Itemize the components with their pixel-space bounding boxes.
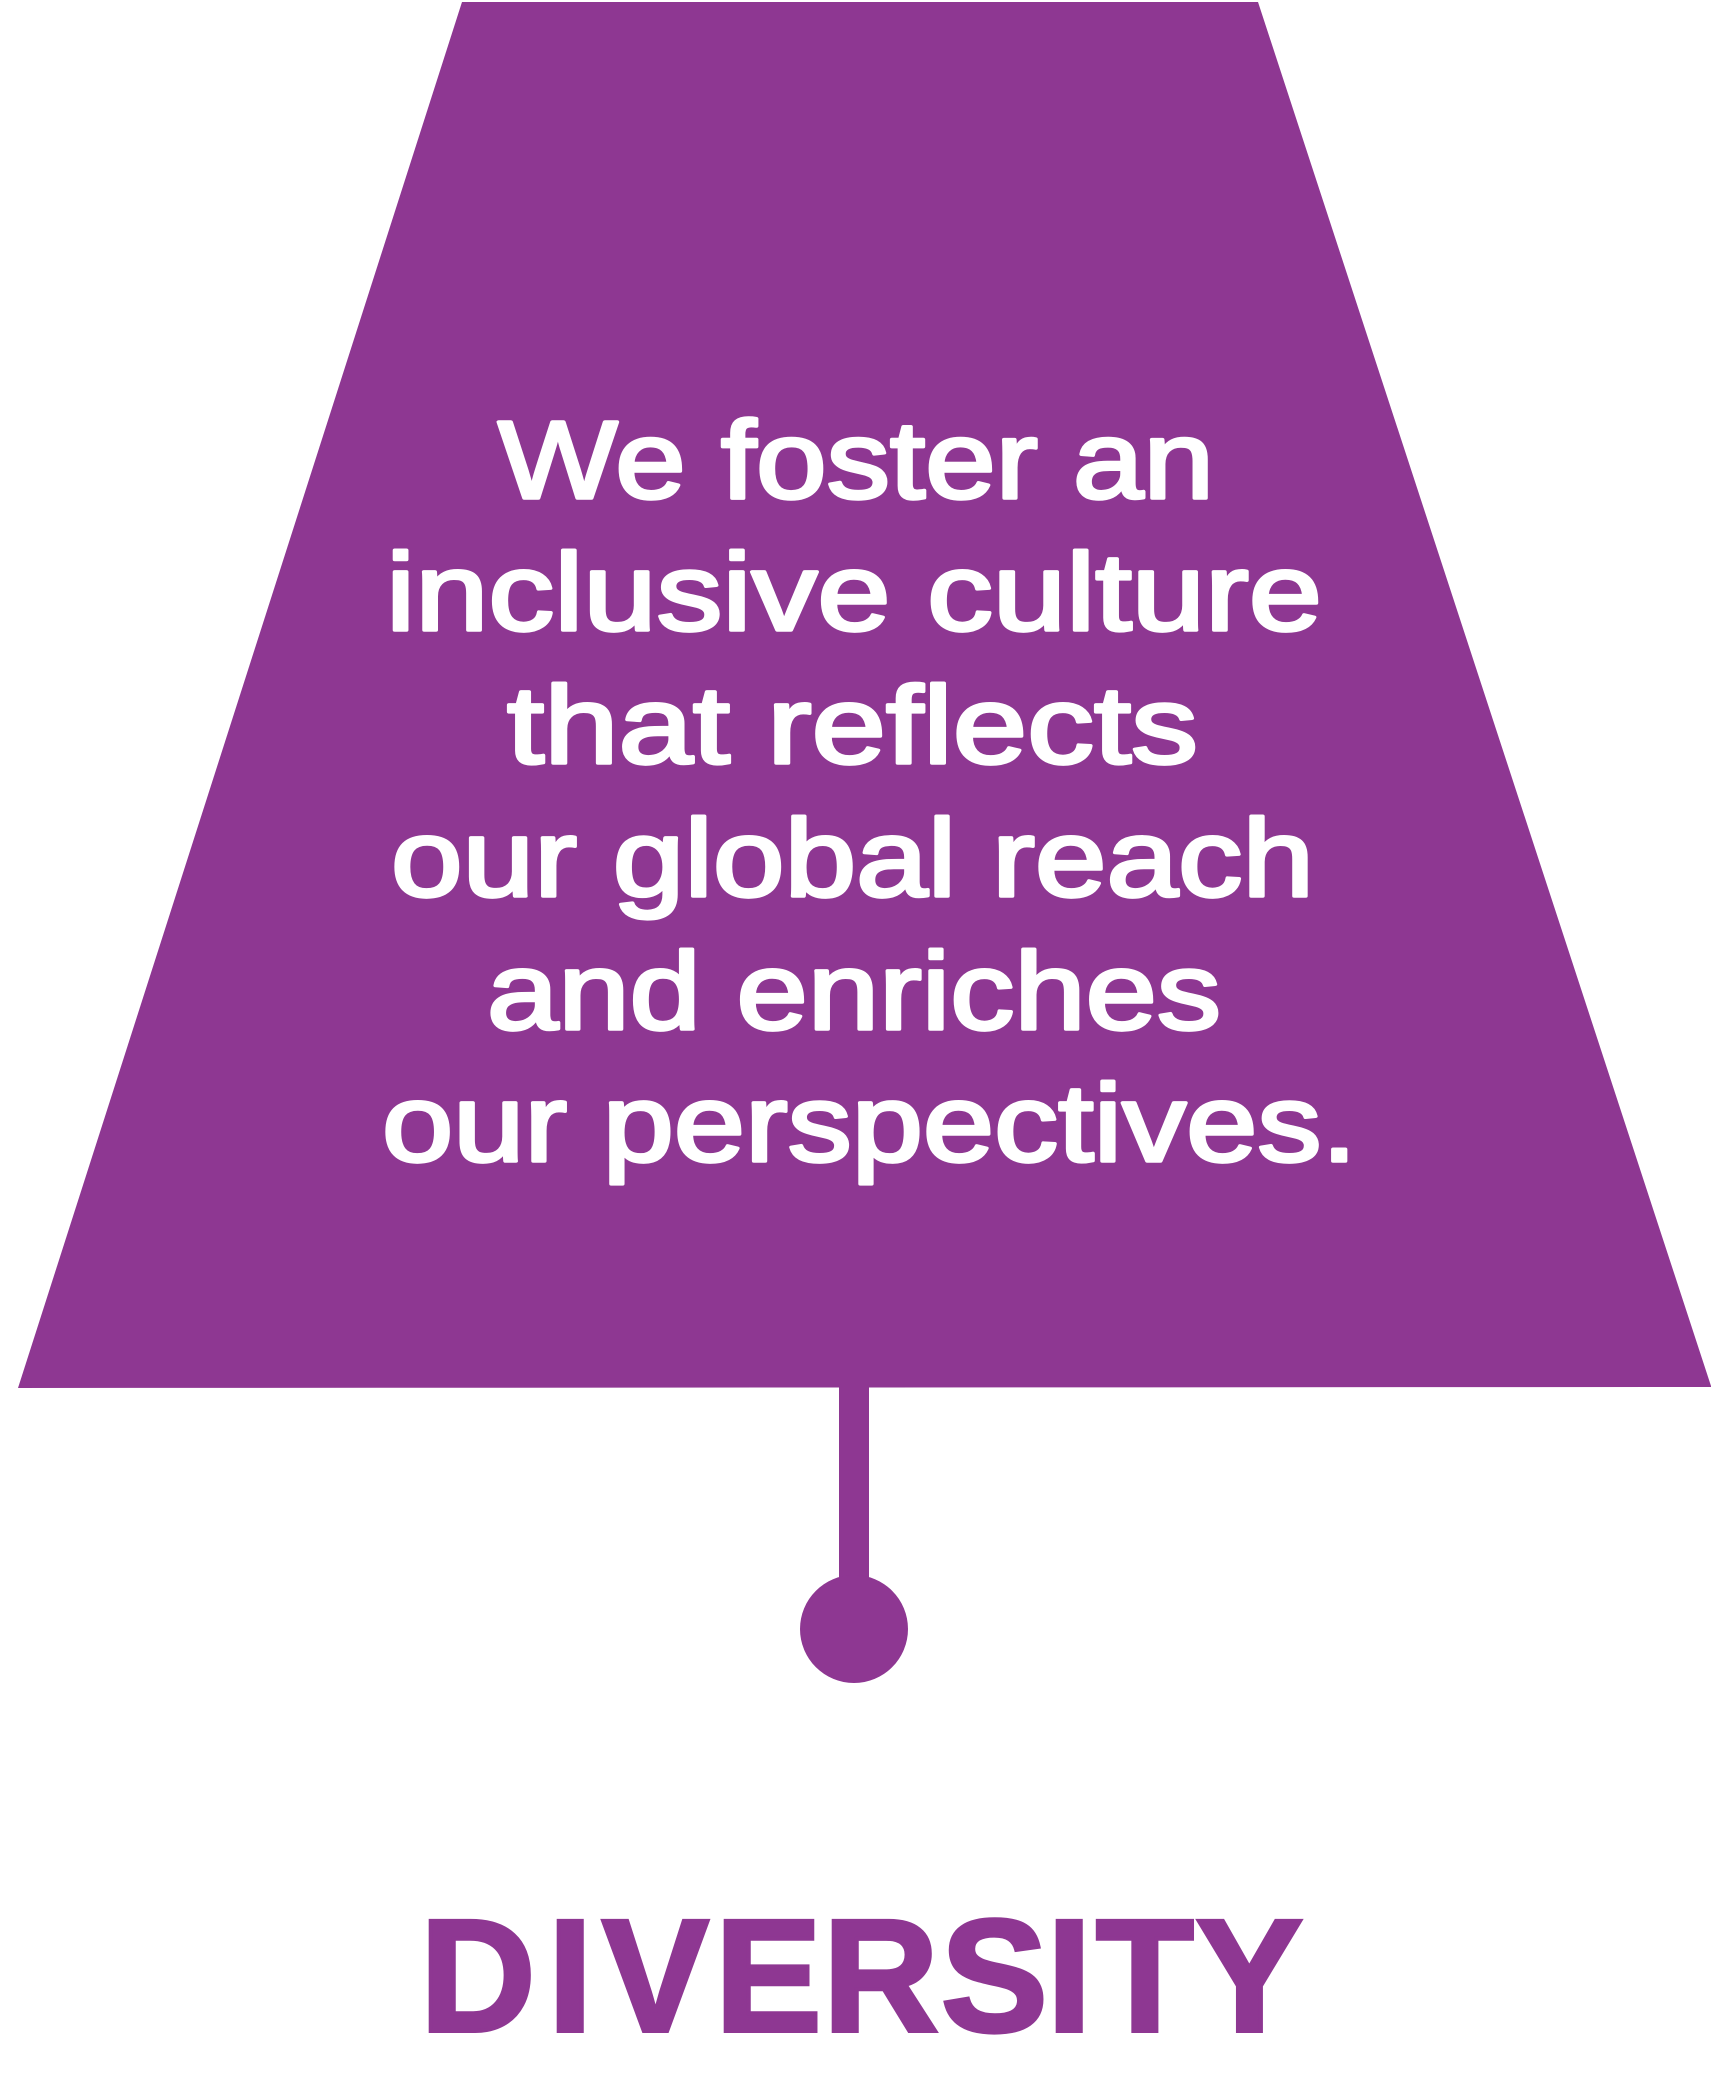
- line 2: inclusive culture: [386, 531, 1322, 654]
- line 5: and enriches: [487, 930, 1221, 1053]
- line 1: We foster an: [498, 399, 1214, 522]
- text block: diversity statement: [382, 399, 1357, 1185]
- panel: purple trapezoid lamp shade: [18, 2, 1711, 1388]
- heading: DIVERSITY: DIVERSITY: [420, 1886, 1303, 2065]
- line 3: that reflects: [507, 664, 1198, 787]
- line 6: our perspectives.: [382, 1062, 1357, 1185]
- connector: stem and circle: [800, 1386, 908, 1683]
- line 4: our global reach: [391, 797, 1314, 920]
